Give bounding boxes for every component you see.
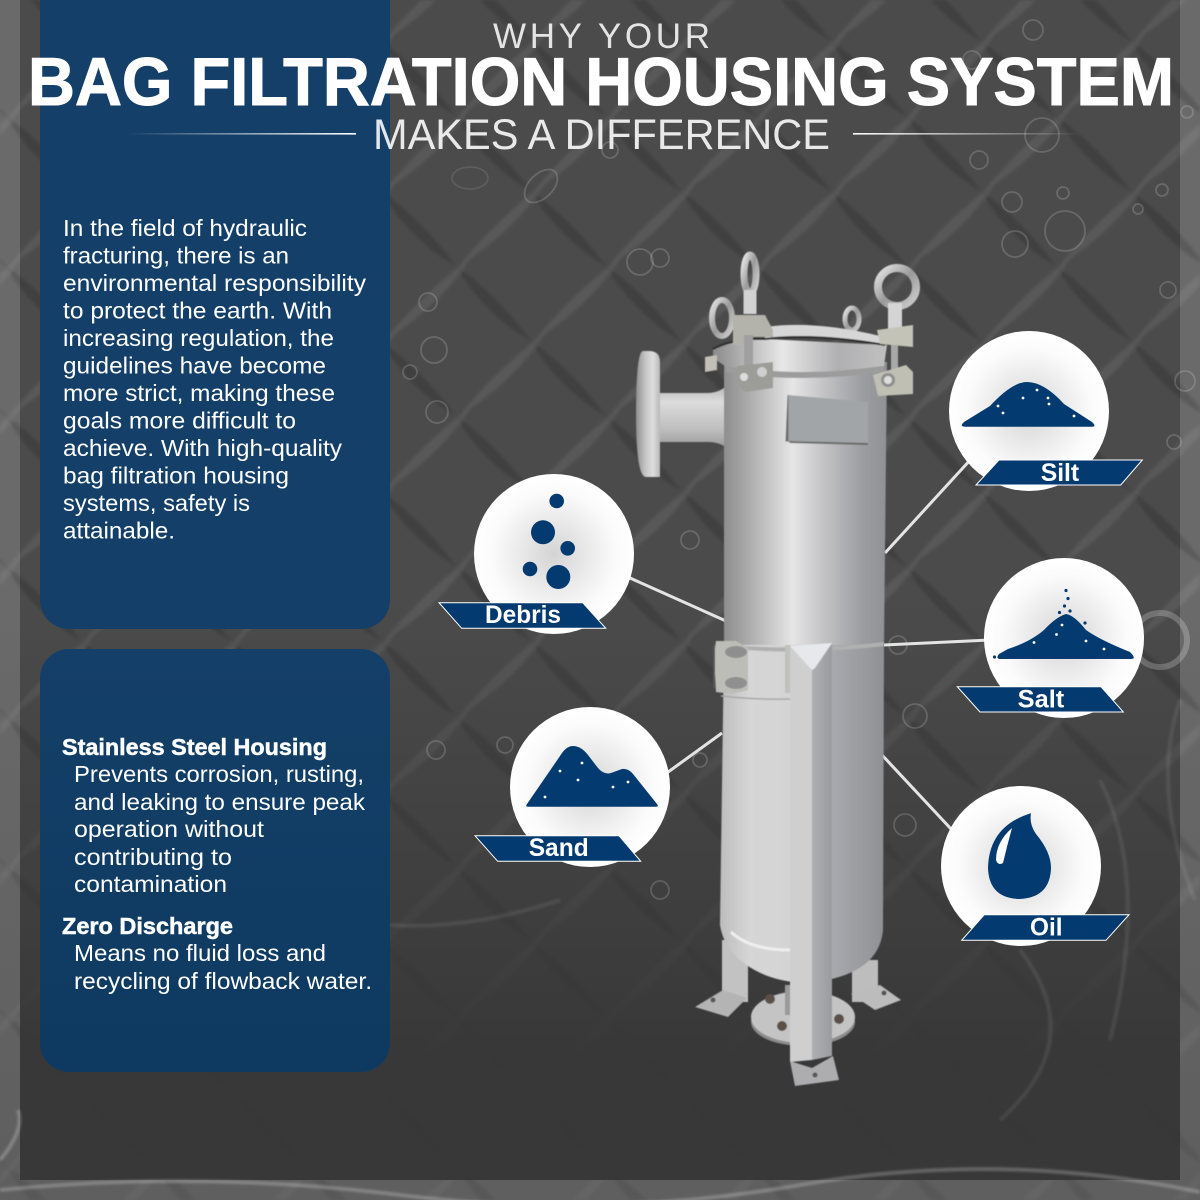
lid bbox=[713, 325, 887, 378]
title bbox=[28, 17, 1174, 159]
label: sand bbox=[475, 834, 641, 862]
icon: silt mound bbox=[962, 382, 1094, 427]
icon: oil drop bbox=[988, 813, 1051, 899]
intro paragraph: guidelines have become bbox=[63, 352, 326, 378]
eye bolts bbox=[712, 255, 916, 336]
main cylinder bbox=[724, 362, 887, 645]
callout: salt bbox=[957, 558, 1144, 718]
feature: stainless steel housing: and leaking to ensure peak bbox=[74, 789, 366, 815]
icon: sand mound bbox=[526, 746, 658, 807]
title: MAKES A DIFFERENCE bbox=[373, 111, 830, 159]
icon: salt pile bbox=[993, 589, 1134, 659]
intro paragraph: systems, safety is bbox=[63, 490, 250, 516]
callout: oil bbox=[941, 786, 1129, 946]
panel: features bbox=[40, 649, 390, 1072]
inlet pipe and flange bbox=[636, 351, 732, 477]
intro paragraph: fracturing, there is an bbox=[63, 242, 289, 268]
intro paragraph: increasing regulation, the bbox=[63, 325, 334, 351]
feature: zero discharge: recycling of flowback water. bbox=[74, 968, 372, 994]
title: BAG FILTRATION HOUSING SYSTEM bbox=[28, 44, 1174, 120]
panel: intro bbox=[40, 0, 390, 629]
label: oil: Oil bbox=[1030, 914, 1062, 942]
name plate bbox=[786, 395, 868, 445]
feature: zero discharge: Zero Discharge bbox=[62, 913, 233, 939]
label: silt bbox=[976, 459, 1142, 487]
connector lines bbox=[630, 458, 990, 830]
callout: debris bbox=[439, 474, 634, 634]
feature: stainless steel housing: Prevents corrosion, rusting, bbox=[74, 761, 364, 787]
front leg bbox=[790, 643, 839, 1086]
intro paragraph: achieve. With high-quality bbox=[63, 435, 343, 461]
callout: silt bbox=[949, 331, 1142, 491]
intro paragraph: In the field of hydraulic bbox=[63, 215, 307, 241]
label: debris: Debris bbox=[485, 601, 561, 629]
label: salt: Salt bbox=[1018, 686, 1065, 714]
label: oil bbox=[962, 914, 1129, 942]
feature: stainless steel housing: operation without bbox=[74, 816, 265, 842]
band clamp bbox=[714, 641, 790, 694]
callout: sand bbox=[475, 707, 670, 867]
feature: zero discharge: Means no fluid loss and bbox=[74, 940, 326, 966]
icon: debris particles bbox=[523, 494, 575, 589]
label: salt bbox=[957, 686, 1123, 714]
intro paragraph: to protect the earth. With bbox=[63, 298, 332, 324]
intro paragraph: more strict, making these bbox=[63, 380, 335, 406]
intro paragraph: bag filtration housing bbox=[63, 462, 289, 488]
lid clamps bbox=[705, 315, 913, 396]
intro paragraph: goals more difficult to bbox=[63, 408, 296, 434]
feature: stainless steel housing bbox=[62, 734, 366, 897]
rear legs and bottom flange bbox=[695, 940, 901, 1046]
label: debris bbox=[439, 601, 606, 629]
label: silt: Silt bbox=[1041, 459, 1080, 487]
intro paragraph: attainable. bbox=[63, 518, 175, 544]
feature: stainless steel housing: contributing to bbox=[74, 844, 232, 870]
filtration vessel illustration bbox=[636, 255, 916, 1086]
feature: zero discharge bbox=[62, 913, 372, 994]
feature: stainless steel housing: Stainless Steel Housing bbox=[62, 734, 327, 760]
intro paragraph: environmental responsibility bbox=[63, 270, 367, 296]
title: WHY YOUR bbox=[493, 17, 710, 56]
feature: stainless steel housing: contamination bbox=[74, 871, 227, 897]
intro paragraph bbox=[63, 215, 367, 544]
label: sand: Sand bbox=[529, 834, 589, 862]
